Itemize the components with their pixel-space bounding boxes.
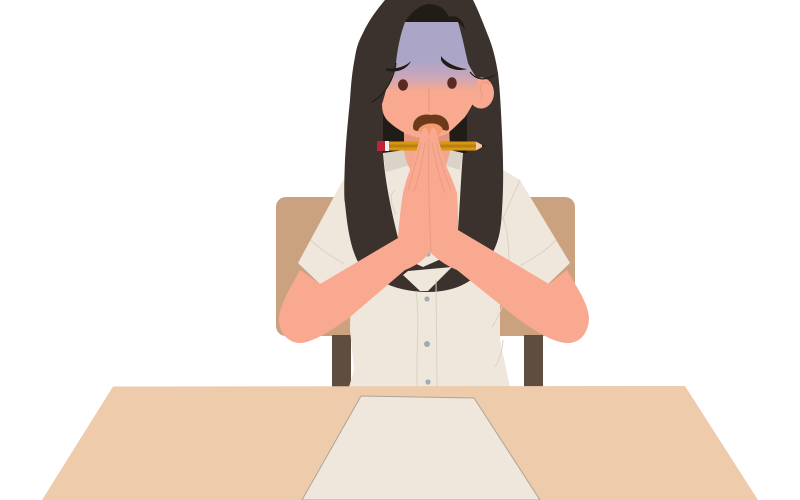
right eye: [447, 77, 457, 89]
hair: [344, 0, 503, 292]
left eye: [398, 79, 408, 91]
face with stress gradient: [382, 22, 478, 138]
mouth: [413, 114, 449, 136]
desk: [42, 386, 758, 500]
collar gap: [403, 267, 452, 291]
nose line: [428, 87, 430, 112]
shirt creases: [311, 180, 556, 387]
left eyebrow: [386, 61, 411, 72]
collar shadow: [383, 150, 463, 172]
pencil: [377, 141, 487, 151]
shirt: [298, 150, 570, 387]
chair leg right: [524, 335, 543, 387]
shirt buttons: [424, 251, 431, 385]
shirt front over hair: [383, 153, 463, 267]
hair strands: [372, 63, 495, 102]
arms and praying hands: [279, 128, 589, 343]
neck: [404, 125, 450, 172]
right eyebrow: [441, 56, 467, 70]
under-chin shadow: [383, 112, 467, 153]
chair leg left: [332, 335, 351, 387]
paper: [302, 396, 540, 500]
fringe hair: [405, 4, 465, 29]
finger lines: [408, 137, 451, 252]
ear: [468, 78, 494, 108]
chair back: [276, 197, 575, 336]
